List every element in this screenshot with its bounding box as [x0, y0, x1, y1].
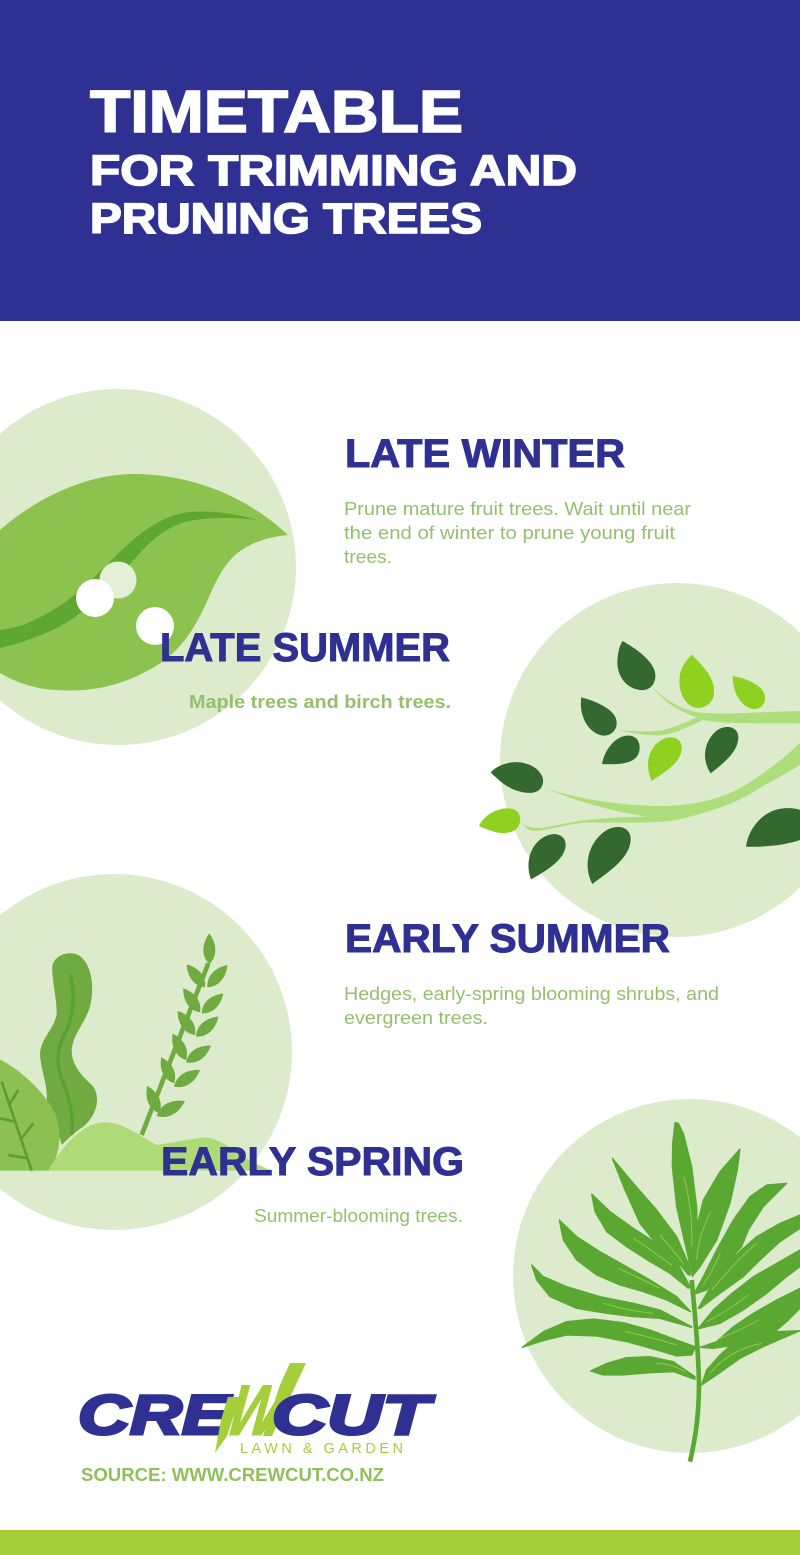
- section: late winter: LATE WINTER: [345, 432, 625, 476]
- section: late winter: [344, 432, 691, 567]
- section: early spring: [161, 1140, 464, 1226]
- title: TIMETABLE: [90, 79, 463, 145]
- source line: SOURCE: WWW.CREWCUT.CO.NZ: [81, 1465, 384, 1485]
- illustration: leaf with water drops: [0, 389, 296, 745]
- section: early spring: EARLY SPRING: [161, 1140, 464, 1184]
- section: late winter: trees.: [344, 546, 392, 567]
- section: late summer: LATE SUMMER: [160, 626, 450, 670]
- logo: Crewcut Lawn and Garden: W: [213, 1371, 299, 1451]
- illustration: branches with leaves: [479, 583, 800, 937]
- section: late winter: the end of winter to prune young fruit: [344, 522, 675, 543]
- section: early summer: [344, 917, 719, 1028]
- section: late summer: [160, 626, 451, 712]
- illustration: plants: [0, 874, 292, 1230]
- section: early spring: Summer-blooming trees.: [254, 1205, 463, 1226]
- logo: Crewcut Lawn and Garden: CRE: [78, 1383, 232, 1446]
- title: PRUNING TREES: [90, 195, 482, 243]
- illustration: palm frond: [513, 1099, 800, 1462]
- bottom bar: [0, 1530, 800, 1555]
- section: early summer: Hedges, early-spring blooming shrubs, and: [344, 983, 719, 1004]
- section: late summer: Maple trees and birch trees.: [189, 691, 451, 712]
- section: early summer: EARLY SUMMER: [345, 917, 670, 961]
- header banner: [0, 0, 800, 321]
- title: [90, 79, 577, 243]
- logo: Crewcut Lawn and Garden: CUT: [272, 1383, 436, 1446]
- section: late winter: Prune mature fruit trees. Wait until near: [344, 498, 691, 519]
- title: FOR TRIMMING AND: [90, 147, 577, 195]
- logo: Crewcut Lawn and Garden: LAWN & GARDEN: [240, 1441, 403, 1457]
- logo: Crewcut Lawn and Garden: [78, 1363, 436, 1457]
- section: early summer: evergreen trees.: [344, 1007, 488, 1028]
